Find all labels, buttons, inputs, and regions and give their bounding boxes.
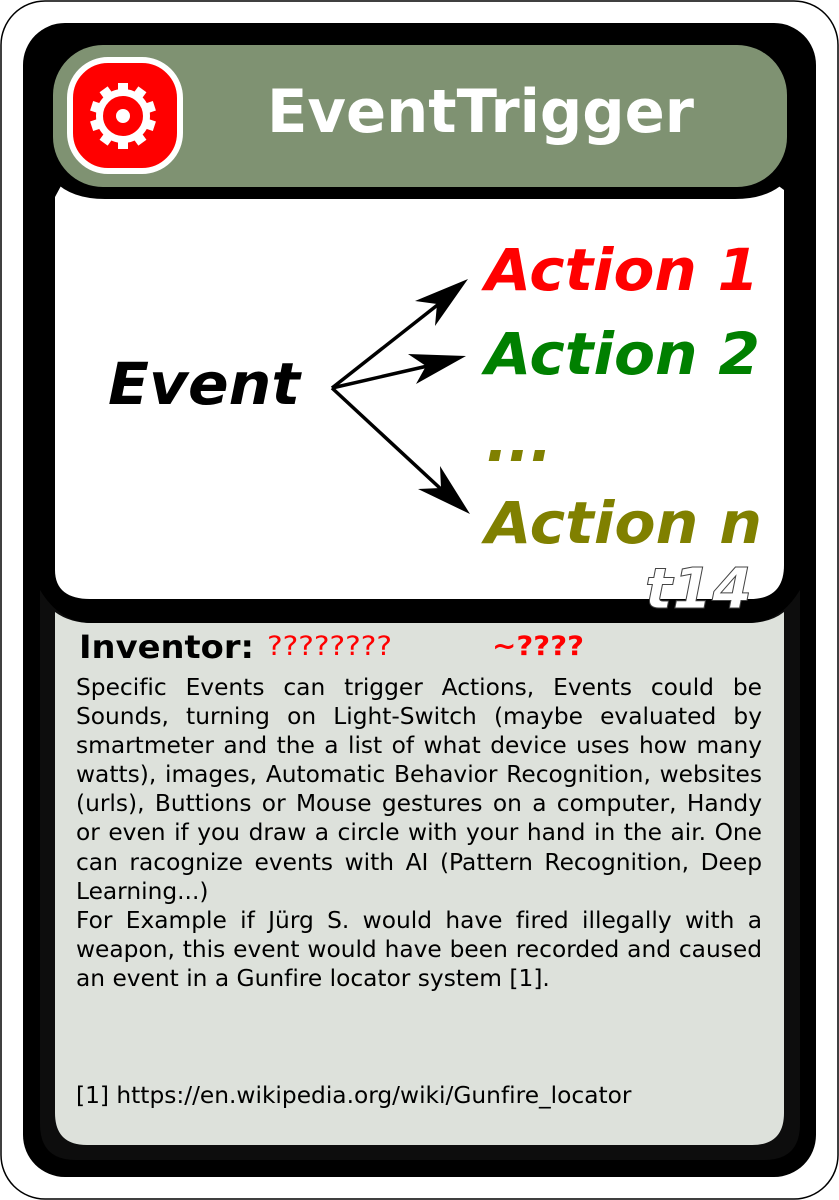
description text: an event in a Gunfire locator system [1]. xyxy=(76,965,550,992)
description text: Learning...) xyxy=(76,878,208,905)
description text xyxy=(76,674,762,992)
description text: smartmeter and the a list of what device uses how many xyxy=(76,732,762,759)
ellipsis: ... xyxy=(486,407,552,475)
inventor name: ???????? xyxy=(267,631,392,662)
description text: Sounds, turning on Light-Switch (maybe evaluated by xyxy=(76,703,762,730)
description text: Specific Events can trigger Actions, Events could be xyxy=(76,674,762,701)
title: EventTrigger xyxy=(267,77,694,147)
gear xyxy=(90,83,156,149)
invention date: ~???? xyxy=(492,631,584,662)
description text: weapon, this event would have been recorded and caused xyxy=(76,936,762,963)
description panel xyxy=(55,612,784,1145)
description text: For Example if Jürg S. would have fired illegally with a xyxy=(76,907,762,934)
description text: or even if you draw a circle with your hand in the air. One xyxy=(76,819,762,846)
event label: Event xyxy=(108,350,302,418)
inner frame shade xyxy=(40,590,800,1160)
diagram: event to actions xyxy=(108,236,762,557)
action 1: Action 1 xyxy=(481,236,759,304)
picture panel xyxy=(55,184,784,599)
arrow to action 2 xyxy=(332,354,466,388)
inventor heading: Inventor: xyxy=(79,628,254,666)
header bar xyxy=(35,45,805,199)
icon: red gear badge xyxy=(70,60,180,171)
card id: t14 xyxy=(645,557,752,622)
description text: watts), images, Automatic Behavior Recognition, websites xyxy=(76,761,762,788)
arrow to action n xyxy=(332,388,470,514)
black band xyxy=(40,570,800,623)
action n: Action n xyxy=(481,489,762,557)
arrow to action 1 xyxy=(332,279,468,388)
reference: [1] https://en.wikipedia.org/wiki/Gunfire_locator xyxy=(76,1082,631,1109)
description text: can racognize events with AI (Pattern Recognition, Deep xyxy=(76,849,762,876)
action 2: Action 2 xyxy=(481,320,760,388)
description text: (urls), Buttions or Mouse gestures on a computer, Handy xyxy=(76,790,762,817)
